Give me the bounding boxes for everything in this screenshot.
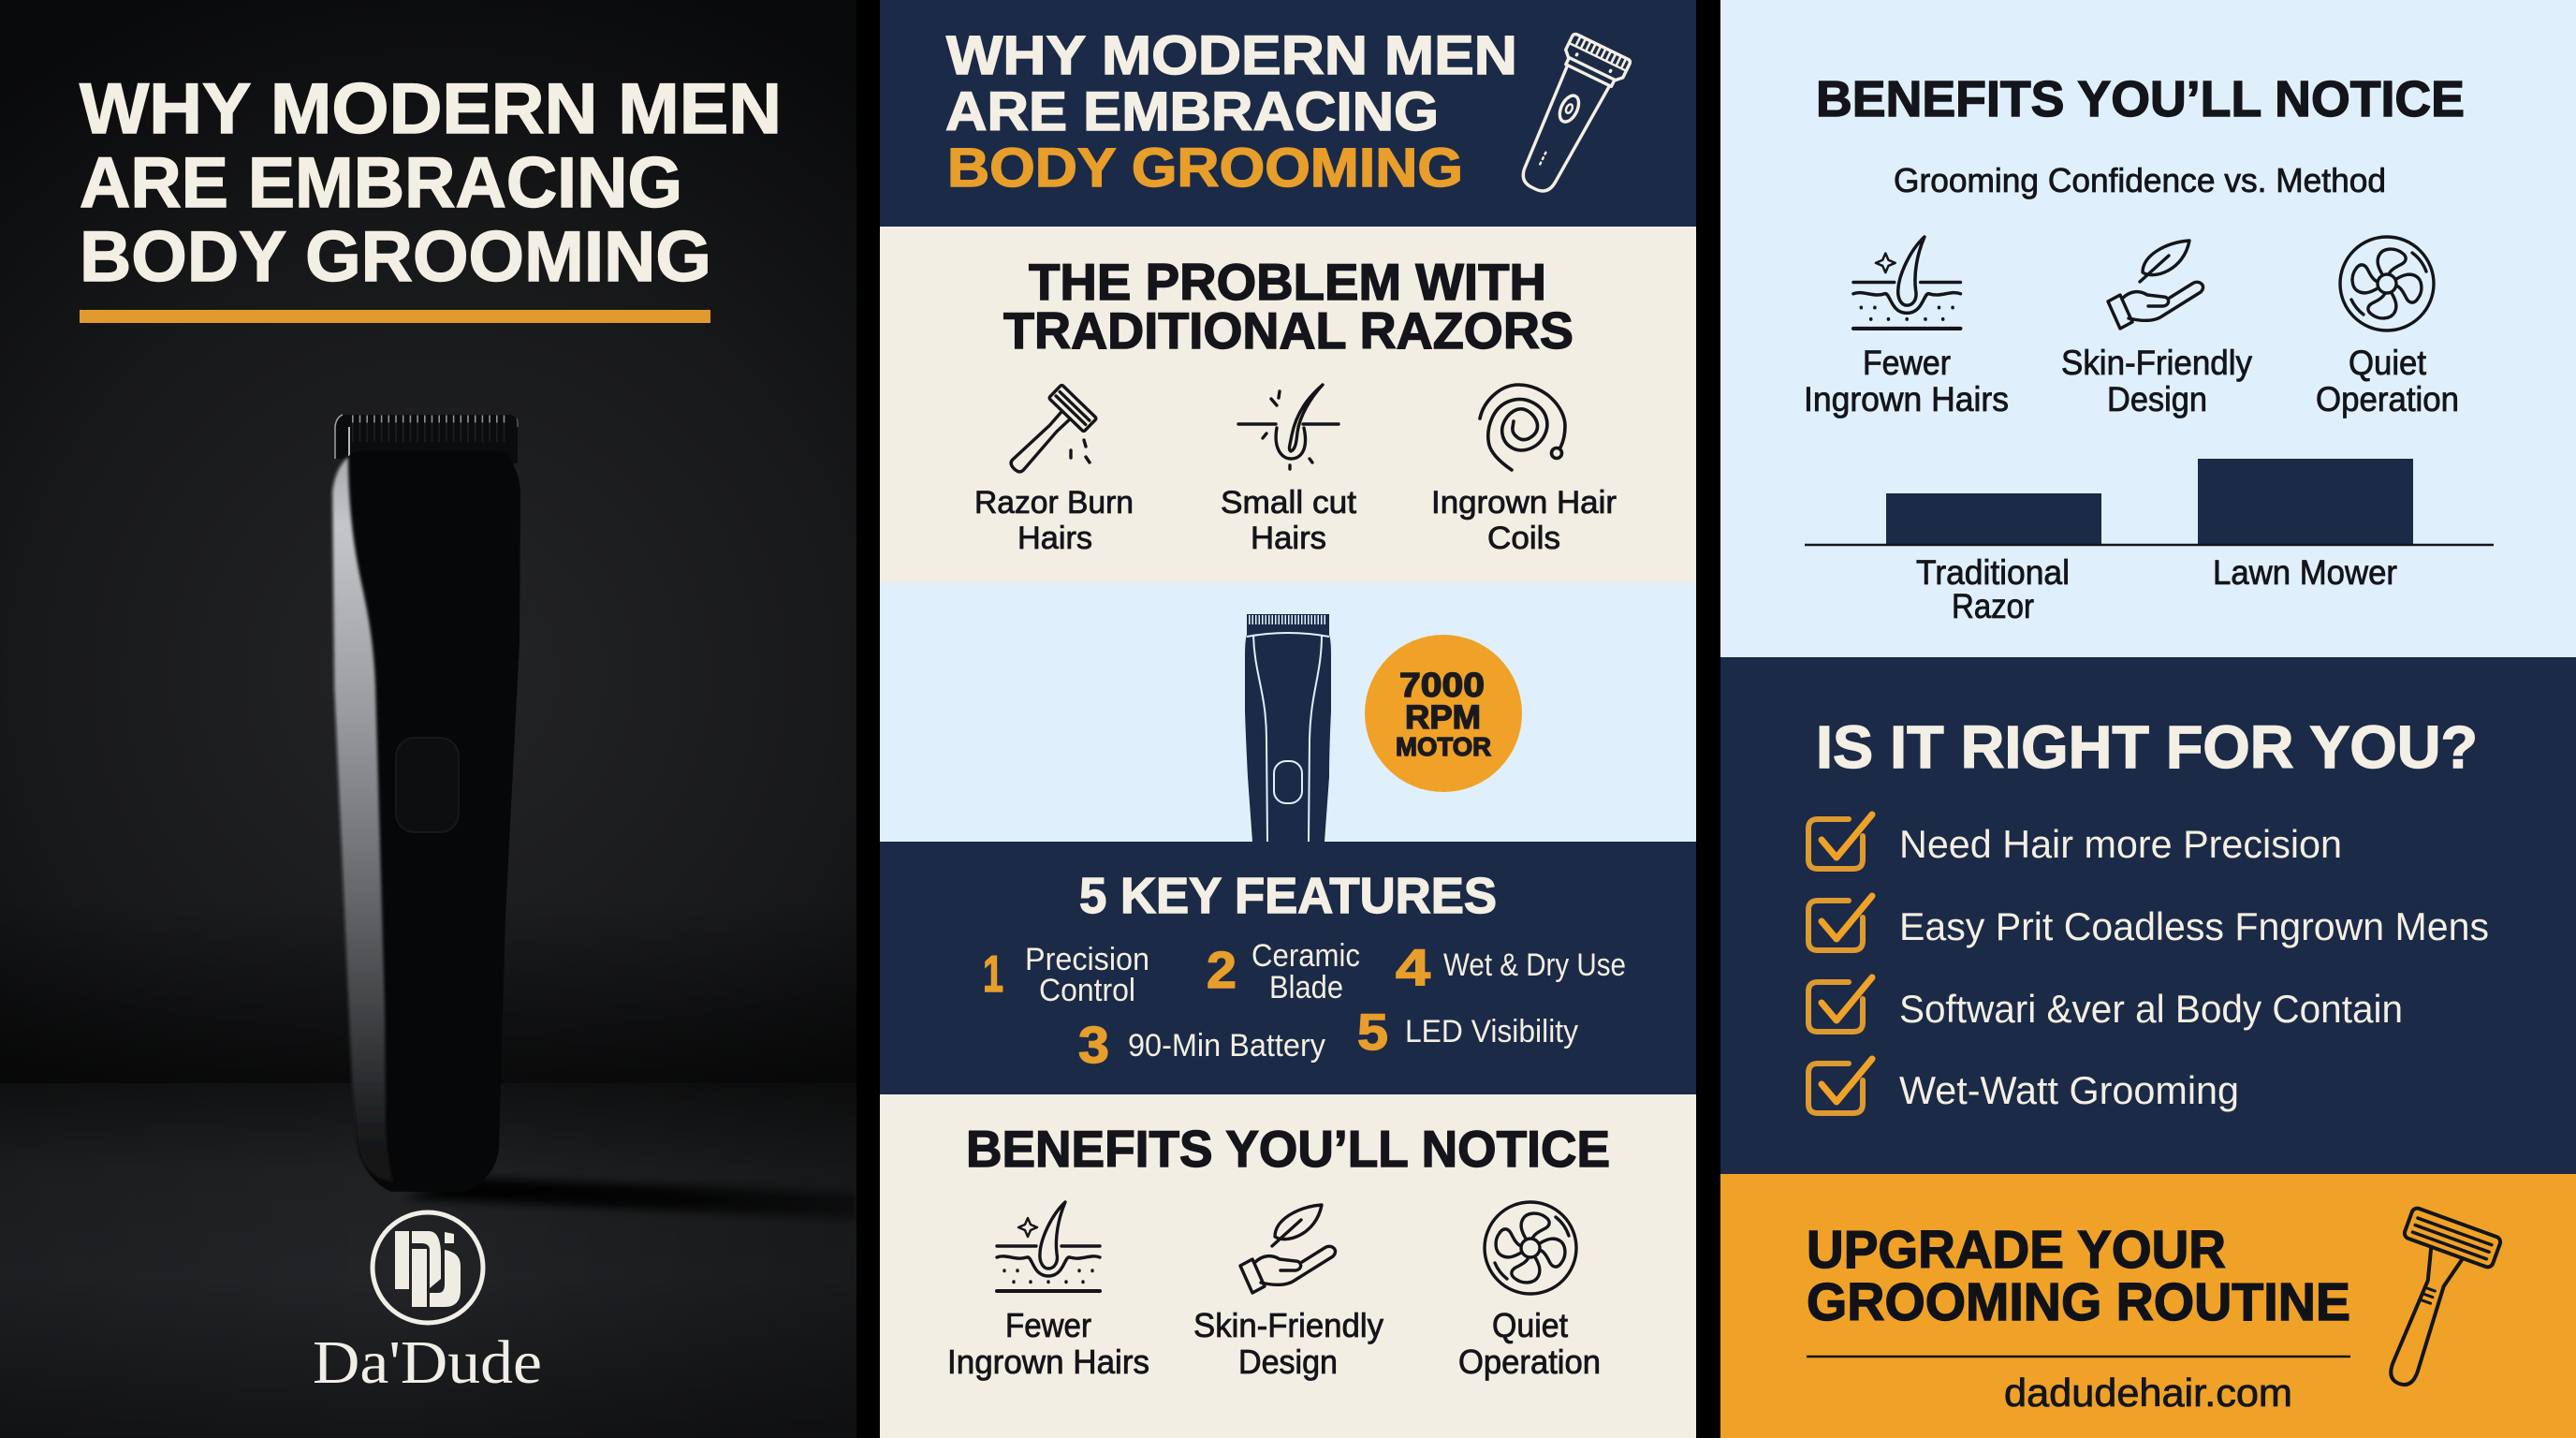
trimmer cast shadow: [402, 1178, 856, 1219]
feature 4: Wet & Dry Use: [1443, 947, 1626, 983]
badge: 7000 rpm motor: MOTOR: [1396, 732, 1491, 761]
column title: WHY MODERN MEN: [946, 25, 1517, 86]
feature 4: [1396, 938, 1626, 996]
label: fewer ingrown hairs: Fewer: [1863, 344, 1951, 382]
label: quiet operation: Quiet: [2349, 344, 2427, 382]
divider line: [1807, 1356, 2350, 1357]
label: quiet operation: [2316, 344, 2459, 418]
checklist item 1: Need Hair more Precision: [1899, 822, 2342, 866]
icon: razor: [2355, 1207, 2502, 1400]
logo mark: [373, 1212, 483, 1323]
label: fewer ingrown hairs: [1804, 344, 2009, 418]
label: razor burn: [974, 485, 1134, 556]
icon: small cut hair: [1238, 385, 1339, 469]
section heading: IS IT RIGHT FOR YOU?: [1816, 713, 2478, 781]
feature 1: Precision: [1025, 942, 1149, 977]
label: skin-friendly design: [1193, 1306, 1383, 1381]
bar chart: [1805, 459, 2494, 625]
checklist item 2: Easy Prit Coadless Fngrown Mens: [1899, 904, 2489, 948]
panel: product diagram: [880, 582, 1696, 842]
icon: quiet fan: [2340, 237, 2434, 330]
label: skin-friendly design: Skin-Friendly: [1193, 1306, 1383, 1344]
icon: trimmer outline: [1505, 33, 1632, 202]
feature 2: 2: [1207, 941, 1237, 999]
section heading: [1003, 253, 1573, 360]
label: quiet operation: [1458, 1306, 1601, 1381]
label: fewer ingrown hairs: Ingrown Hairs: [1804, 380, 2009, 418]
power button: [396, 738, 459, 832]
panel: is it right for you: [1720, 657, 2576, 1174]
hero title: WHY MODERN MEN: [80, 69, 782, 149]
label: skin-friendly design: Skin-Friendly: [2061, 344, 2252, 382]
checklist item 1: [1808, 814, 2342, 869]
hero title: ARE EMBRACING: [80, 143, 682, 223]
chart title: Grooming Confidence vs. Method: [1894, 161, 2386, 199]
feature 2: Blade: [1269, 970, 1343, 1005]
label: skin-friendly design: Design: [1238, 1343, 1338, 1381]
panel: call to action: [1720, 1174, 2576, 1438]
badge: 7000 rpm motor: [1365, 635, 1522, 792]
blade head: [335, 415, 518, 463]
section heading: THE PROBLEM WITH: [1029, 253, 1546, 311]
panel: column 2 header: [880, 0, 1696, 227]
feature 1: [983, 942, 1149, 1008]
label: skin-friendly design: [2061, 344, 2252, 418]
feature 3: 3: [1078, 1016, 1109, 1074]
bar chart: Lawn Mower: [2213, 553, 2397, 592]
navy trimmer silhouette: [1245, 614, 1331, 842]
icon: quiet fan: [1485, 1202, 1576, 1294]
label: small cut: Hairs: [1251, 521, 1326, 556]
label: fewer ingrown hairs: Ingrown Hairs: [947, 1343, 1149, 1381]
feature 5: LED Visibility: [1405, 1014, 1578, 1049]
section heading: 5 KEY FEATURES: [1079, 868, 1497, 924]
label: razor burn: Razor Burn: [974, 485, 1134, 521]
label: small cut: Small cut: [1221, 485, 1357, 521]
badge: 7000 rpm motor: 7000: [1399, 666, 1485, 704]
icon: skin-friendly hand and leaf: [2108, 241, 2203, 329]
label: fewer ingrown hairs: [947, 1306, 1149, 1381]
label: quiet operation: Operation: [2316, 380, 2459, 418]
label: razor burn: Hairs: [1017, 521, 1092, 556]
label: ingrown hair: [1431, 485, 1617, 556]
label: ingrown hair: Coils: [1487, 521, 1560, 556]
icon: fewer ingrown hairs: [997, 1202, 1100, 1291]
panel: 5 key features: [880, 842, 1696, 1094]
panel: benefits with chart: [1720, 0, 2576, 657]
feature 4: 4: [1396, 938, 1430, 996]
checklist item 3: [1808, 977, 2403, 1032]
feature 5: [1357, 1003, 1578, 1061]
icon: skin-friendly hand and leaf: [1240, 1205, 1336, 1293]
website url: dadudehair.com: [2004, 1371, 2292, 1415]
section heading: TRADITIONAL RAZORS: [1003, 301, 1573, 360]
badge: 7000 rpm motor: RPM: [1405, 699, 1481, 736]
floor surface: [0, 1083, 856, 1438]
feature 5: 5: [1357, 1003, 1388, 1061]
brand name: Da'Dude: [313, 1328, 542, 1397]
feature 1: Control: [1039, 973, 1135, 1008]
bar chart: Traditional: [1916, 553, 2070, 592]
hero title: [80, 69, 782, 297]
column title: ARE EMBRACING: [945, 81, 1439, 142]
label: small cut: [1221, 485, 1357, 556]
label: quiet operation: Quiet: [1492, 1306, 1568, 1344]
feature 3: 90-Min Battery: [1128, 1028, 1325, 1064]
icon: razor: [997, 385, 1097, 486]
silver side panel: [332, 457, 393, 1181]
label: quiet operation: Operation: [1458, 1343, 1601, 1381]
feature 3: [1078, 1016, 1325, 1074]
panel: the problem with traditional razors: [880, 227, 1696, 582]
label: fewer ingrown hairs: Fewer: [1005, 1306, 1091, 1344]
feature 2: [1207, 938, 1360, 1005]
checklist item 3: Softwari &ver al Body Contain: [1899, 987, 2403, 1031]
label: ingrown hair: Ingrown Hair: [1431, 485, 1617, 521]
icon: fewer ingrown hairs: [1853, 237, 1960, 329]
checklist item 4: [1808, 1059, 2239, 1113]
cta heading: UPGRADE YOUR: [1807, 1220, 2226, 1280]
column title: BODY GROOMING: [947, 138, 1463, 198]
cta heading: [1807, 1220, 2350, 1332]
checklist item 2: [1808, 896, 2489, 950]
icon: ingrown hair coil: [1480, 385, 1565, 470]
label: skin-friendly design: Design: [2107, 380, 2207, 418]
panel: benefits, cream: [880, 1094, 1696, 1438]
trimmer body: [332, 451, 520, 1192]
feature 2: Ceramic: [1251, 938, 1360, 974]
bar chart: Razor: [1952, 587, 2034, 625]
title underline: [80, 310, 710, 323]
product photo: black trimmer: [332, 415, 520, 1192]
hero title: BODY GROOMING: [80, 217, 711, 297]
column title: [945, 25, 1517, 198]
checklist item 4: Wet-Watt Grooming: [1899, 1068, 2239, 1112]
feature 1: 1: [983, 945, 1003, 1003]
panel: dark product hero: [0, 0, 856, 1438]
section heading: BENEFITS YOU’LL NOTICE: [1816, 71, 2465, 127]
section heading: BENEFITS YOU’LL NOTICE: [966, 1120, 1610, 1178]
cta heading: GROOMING ROUTINE: [1807, 1272, 2350, 1332]
